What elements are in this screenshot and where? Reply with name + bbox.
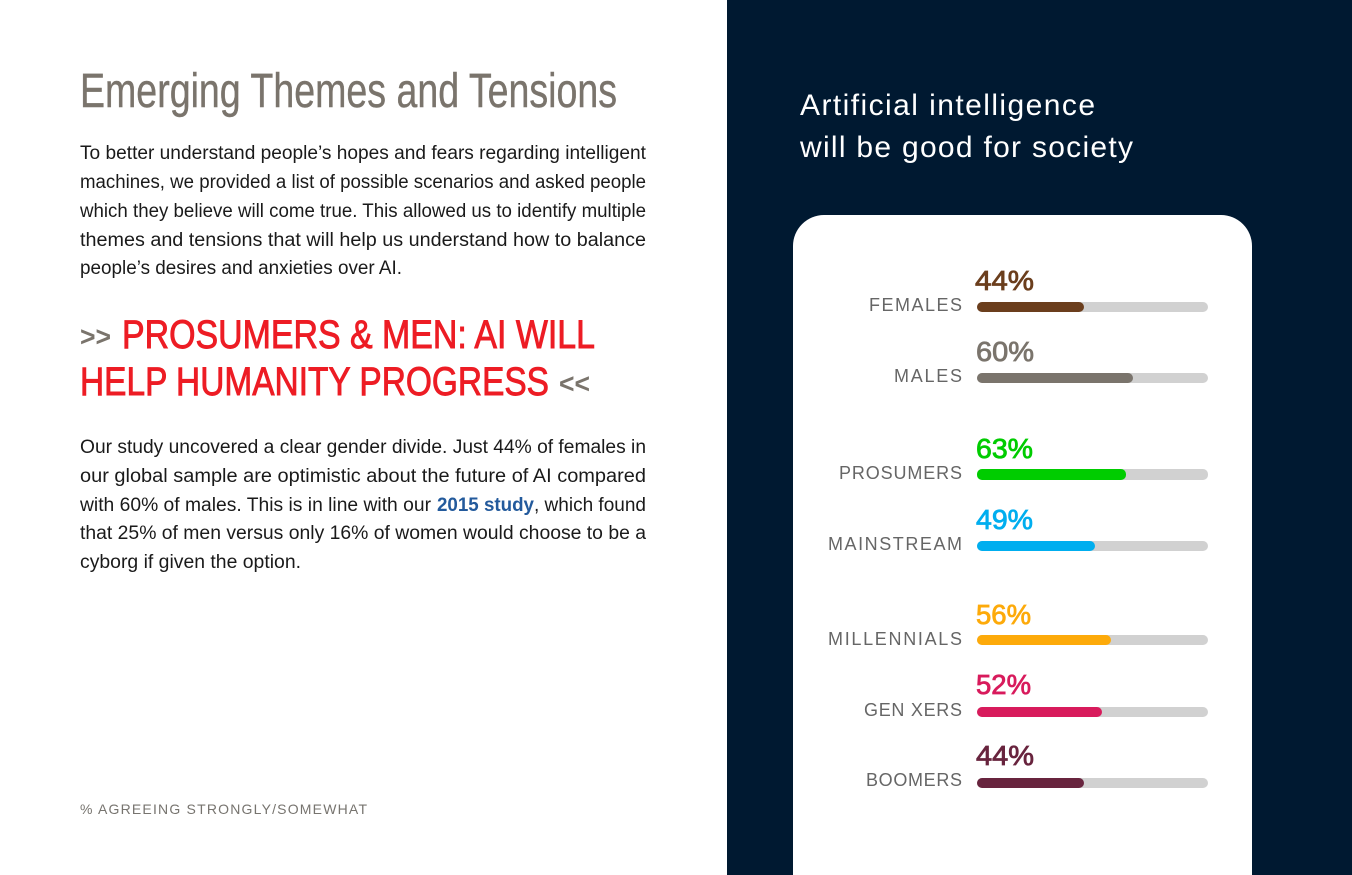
study paragraph: 2015 study: [437, 495, 534, 516]
headline: HELP HUMANITY PROGRESS: [80, 360, 549, 404]
intro paragraph: which they believe will come true. This allowed us to identify multiple: [79, 201, 646, 222]
chart heading: will be good for society: [799, 131, 1133, 164]
study paragraph: our global sample are optimistic about the future of AI compared: [80, 466, 646, 487]
row: gen xers: 52%: [976, 669, 1031, 700]
row: millennials: MILLENNIALS: [828, 629, 962, 649]
panel: dark background: [727, 0, 1352, 875]
chart heading: [799, 89, 1133, 164]
intro paragraph: machines, we provided a list of possible scenarios and asked people: [80, 172, 646, 193]
intro paragraph: people’s desires and anxieties over AI.: [80, 258, 402, 279]
row: mainstream: MAINSTREAM: [828, 534, 962, 554]
row: males: MALES: [894, 366, 962, 386]
row: millennials: [828, 599, 1208, 649]
row: prosumers: PROSUMERS: [839, 463, 962, 483]
headline: <<: [559, 368, 590, 399]
study paragraph: , which found: [534, 495, 646, 516]
headline: [80, 313, 595, 404]
study paragraph: with 60% of males. This is in line with our: [79, 495, 432, 516]
row: boomers: 44%: [976, 740, 1034, 771]
panel: chart card: [793, 215, 1252, 875]
intro paragraph: To better understand people’s hopes and fears regarding intelligent: [80, 143, 647, 164]
chart heading: Artificial intelligence: [800, 89, 1095, 122]
study paragraph: that 25% of men versus only 16% of women would choose to be a: [80, 523, 646, 544]
row: prosumers: 63%: [976, 433, 1033, 464]
intro paragraph: themes and tensions that will help us understand how to balance: [80, 230, 646, 251]
study paragraph: Our study uncovered a clear gender divide. Just 44% of females in: [80, 437, 646, 458]
row: males: 60%: [976, 336, 1034, 367]
study paragraph: cyborg if given the option.: [80, 552, 301, 573]
footnote: % AGREEING STRONGLY/SOMEWHAT: [80, 801, 367, 817]
headline: PROSUMERS & MEN: AI WILL: [122, 313, 595, 357]
row: females: 44%: [975, 265, 1034, 296]
row: females: FEMALES: [869, 295, 962, 315]
bar chart: [828, 265, 1208, 790]
row: gen xers: [864, 669, 1208, 720]
row: mainstream: [828, 504, 1208, 554]
headline: >>: [80, 321, 111, 352]
row: males: [894, 336, 1208, 386]
row: mainstream: 49%: [976, 504, 1033, 535]
row: gen xers: GEN XERS: [864, 700, 962, 720]
row: boomers: [866, 740, 1208, 790]
study paragraph: [79, 437, 646, 573]
title: Emerging Themes and Tensions: [80, 65, 617, 118]
intro paragraph: [79, 143, 647, 279]
row: millennials: 56%: [976, 599, 1031, 630]
row: prosumers: [839, 433, 1208, 483]
row: boomers: BOOMERS: [866, 770, 962, 790]
row: females: [869, 265, 1208, 315]
